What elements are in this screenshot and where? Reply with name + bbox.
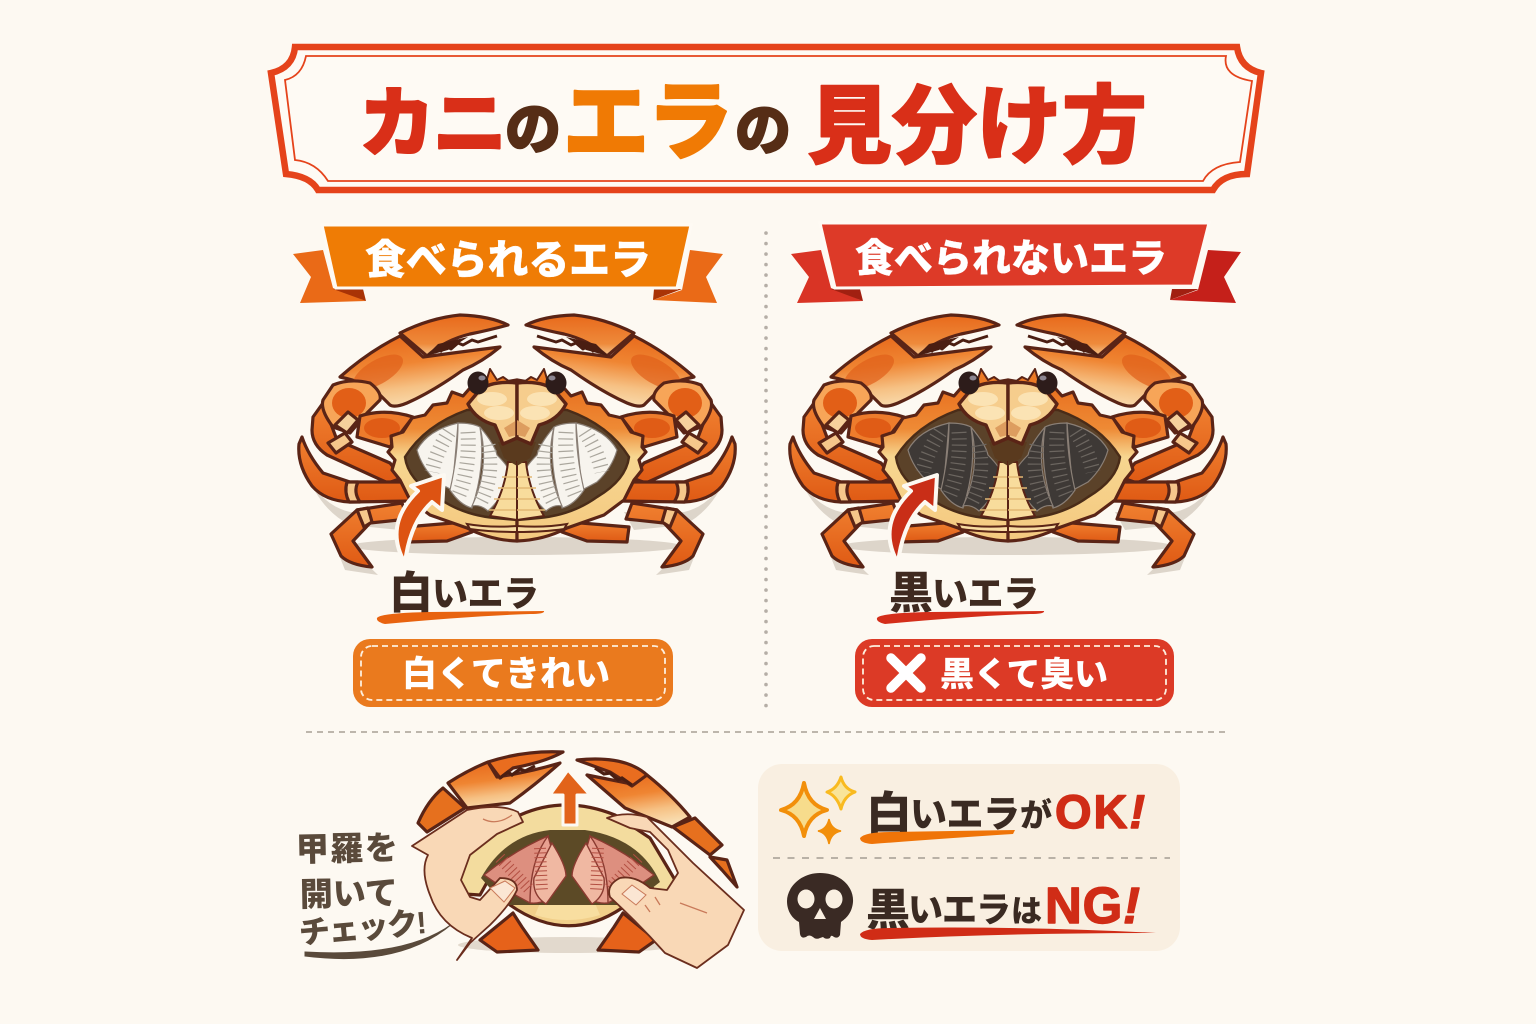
pill: black and smelly <box>855 639 1174 707</box>
banner: inedible gills: 食べられないエラ <box>855 238 1167 281</box>
text: white gills OK <box>860 785 1145 844</box>
arrow to black gills <box>890 475 937 563</box>
title frame and heading <box>271 47 1261 190</box>
label: black gills: 黒 <box>889 569 933 618</box>
handwritten note <box>295 829 452 959</box>
title frame and heading: の <box>735 99 791 162</box>
banner: edible gills: 食べられるエラ <box>365 237 651 283</box>
title frame and heading: カ <box>359 82 435 167</box>
crab legs <box>480 913 538 952</box>
title frame and heading: の <box>505 98 561 161</box>
title frame and heading: ニ <box>433 83 507 166</box>
text: black gills NG: NG! <box>1045 877 1140 934</box>
label: black gills: いエラ <box>932 573 1039 614</box>
pink gills <box>484 836 654 904</box>
text: white gills OK: いエラ <box>910 794 1020 835</box>
icon: cross <box>891 658 921 688</box>
handwritten note: 開いて <box>299 874 398 913</box>
crab with black gills <box>790 315 1226 575</box>
black gills <box>908 423 1108 511</box>
text: black gills NG: 黒 <box>866 886 910 935</box>
white gills <box>417 423 617 511</box>
right claw <box>710 857 737 887</box>
horizontal dashed divider <box>306 731 1226 733</box>
text: black gills NG <box>860 877 1156 940</box>
up arrow <box>550 770 590 825</box>
crab with white gills <box>299 315 735 575</box>
text: white gills OK: が <box>1020 797 1052 833</box>
text: white gills OK: 白 <box>866 788 912 840</box>
panel: summary <box>758 764 1180 951</box>
shell <box>510 880 622 926</box>
label: white gills <box>377 569 544 624</box>
arrow to white gills <box>397 475 444 563</box>
label: white gills: いエラ <box>432 573 539 614</box>
illustration: hands opening crab <box>412 752 744 968</box>
pill: white and clean: 白くてきれい <box>402 655 610 694</box>
center vertical dotted divider <box>764 233 768 708</box>
title frame and heading: 見分け方 <box>807 80 1147 175</box>
pill: black and smelly: 黒くて臭い <box>940 656 1108 694</box>
banner: inedible gills <box>791 223 1241 303</box>
pill: white and clean <box>353 639 673 707</box>
icon: skull <box>787 873 853 939</box>
icon: sparkles <box>781 777 855 844</box>
left hand <box>412 807 523 960</box>
handwritten note: チェック! <box>298 905 428 951</box>
text: black gills NG: は <box>1011 894 1042 929</box>
right hand <box>607 814 744 968</box>
handwritten note: 甲羅を <box>295 829 398 868</box>
label: white gills: 白 <box>389 569 433 618</box>
title frame and heading: エラ <box>563 75 733 171</box>
label: black gills <box>877 569 1044 624</box>
left claw <box>418 788 465 832</box>
text: white gills OK: OK! <box>1055 785 1145 838</box>
text: black gills NG: いエラ <box>908 891 1011 930</box>
banner: edible gills <box>293 225 723 303</box>
